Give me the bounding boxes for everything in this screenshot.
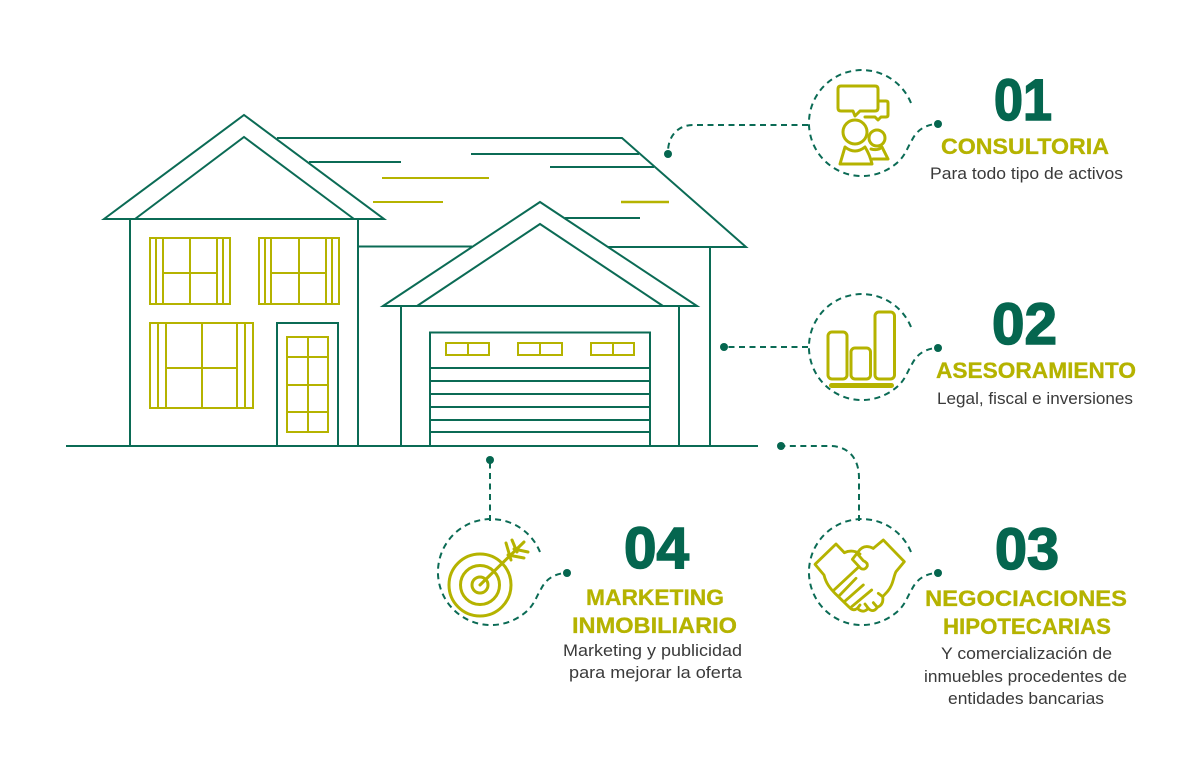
description 03: Y comercialización de bbox=[941, 644, 1112, 663]
icon: bar chart bbox=[828, 312, 894, 388]
panel: 04 marketing inmobiliario bbox=[438, 516, 743, 682]
garage door windows bbox=[446, 343, 634, 355]
upper window right bbox=[259, 238, 339, 304]
description 03: inmuebles procedentes de bbox=[924, 667, 1127, 686]
number 02: 02 bbox=[992, 292, 1057, 357]
number 03: 03 bbox=[995, 517, 1059, 582]
right wall bbox=[709, 247, 711, 446]
panel: 02 asesoramiento bbox=[809, 292, 1136, 408]
left gable bbox=[104, 115, 384, 219]
number 04: 04 bbox=[624, 516, 689, 581]
heading marketing inmobiliario bbox=[572, 585, 737, 638]
dashed ring 03 bbox=[809, 519, 942, 625]
heading marketing inmobiliario: MARKETING bbox=[586, 585, 724, 610]
garage door bbox=[430, 332, 650, 446]
roof accents bbox=[373, 178, 489, 202]
icon: target with arrow bbox=[449, 540, 528, 616]
dashed ring 04 bbox=[438, 519, 571, 625]
illustration: house bbox=[66, 115, 758, 446]
description 01: Para todo tipo de activos bbox=[930, 164, 1123, 183]
icon: people talking bbox=[838, 86, 888, 164]
main roof bbox=[277, 138, 746, 247]
description 02: Legal, fiscal e inversiones bbox=[937, 389, 1133, 408]
front door bbox=[277, 323, 338, 446]
description 03: entidades bancarias bbox=[948, 689, 1104, 708]
garage gable bbox=[383, 202, 697, 306]
description 04: Marketing y publicidad bbox=[563, 641, 742, 660]
description 04 bbox=[563, 641, 743, 682]
panel: 03 negociaciones hipotecarias bbox=[809, 517, 1127, 708]
dashed ring 01 bbox=[809, 70, 942, 176]
number 01: 01 bbox=[994, 68, 1052, 133]
roof accent thick bbox=[621, 201, 669, 203]
heading negociaciones hipotecarias: NEGOCIACIONES bbox=[925, 586, 1127, 611]
panel: 01 consultoria bbox=[809, 68, 1123, 183]
left walls bbox=[130, 219, 358, 446]
heading negociaciones hipotecarias: HIPOTECARIAS bbox=[943, 614, 1111, 639]
icon: handshake bbox=[815, 540, 904, 611]
upper window left bbox=[150, 238, 230, 304]
ground line bbox=[66, 445, 758, 447]
connector: house to 02 bbox=[720, 343, 808, 351]
connector: house to 01 bbox=[664, 125, 808, 158]
heading consultoria: CONSULTORIA bbox=[941, 134, 1109, 159]
description 04: para mejorar la oferta bbox=[569, 663, 743, 682]
heading marketing inmobiliario: INMOBILIARIO bbox=[572, 613, 737, 638]
lower window bbox=[150, 323, 253, 408]
connector: house to 04 bbox=[486, 456, 494, 521]
garage walls bbox=[401, 306, 679, 446]
connector: house to 03 bbox=[777, 442, 859, 521]
heading negociaciones hipotecarias bbox=[925, 586, 1127, 639]
heading asesoramiento: ASESORAMIENTO bbox=[936, 358, 1136, 383]
dashed ring 02 bbox=[809, 294, 942, 400]
description 03 bbox=[924, 644, 1127, 708]
door window bbox=[287, 337, 328, 432]
